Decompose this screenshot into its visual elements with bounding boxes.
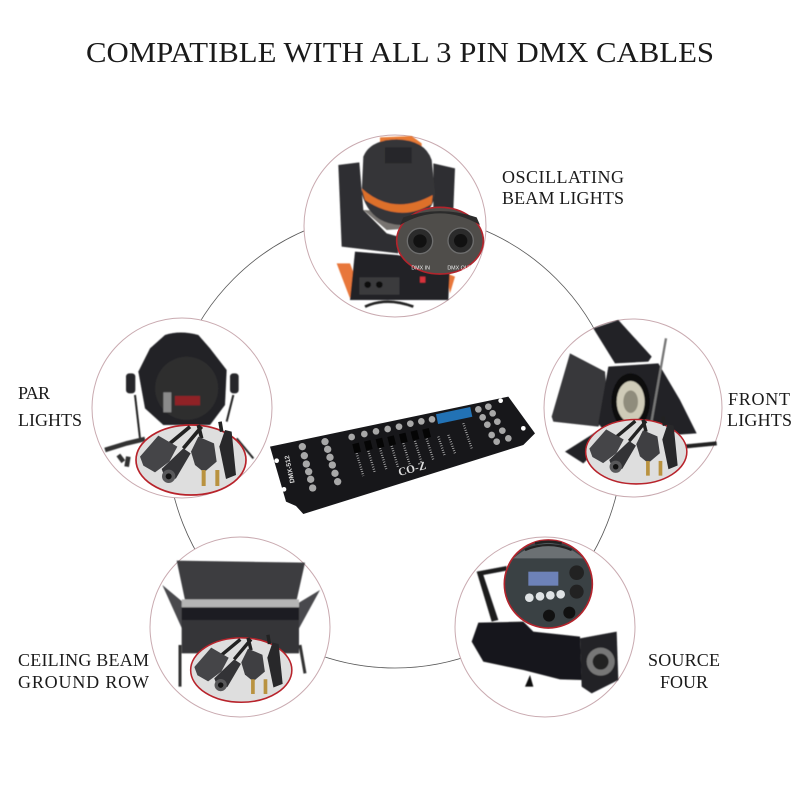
label: oscillating beam lights [502,167,624,208]
panel: par lights [92,318,272,498]
icon: connector callout [191,635,292,702]
label: front lights [727,389,792,430]
icon: DMX in and out sockets callout [397,207,483,274]
scene and fixture buttons [299,403,512,492]
icon: connector callout [586,416,687,484]
label: par lights: PAR [18,383,50,403]
label: front lights: LIGHTS [727,410,792,430]
label: source four: SOURCE [648,650,720,670]
label: par lights [18,383,82,430]
label: front lights: FRONT [728,389,790,409]
controller body [270,397,535,514]
panel: DMX-512 controller [270,397,535,514]
icon: control panel callout [504,540,592,628]
label: par lights: LIGHTS [18,410,82,430]
faders [357,423,472,476]
label: source four: FOUR [660,672,708,692]
label: source four [648,650,720,692]
icon: par light [105,332,253,495]
icon: DMX in and out sockets callout: DMX OUT [447,265,473,271]
display [436,407,472,424]
panel: source four [455,537,635,717]
label: ceiling beam ground row: GROUND ROW [18,672,149,692]
icon: source four spotlight [472,540,618,693]
brand and model text: CO-Z [397,460,427,479]
panel: DMX-512 controller: DMX-512 [284,454,297,484]
label: oscillating beam lights: BEAM LIGHTS [502,188,624,208]
icon: ceiling beam light [162,561,320,702]
icon: connector callout [136,422,246,495]
icon: moving head light [337,136,483,307]
title: COMPATIBLE WITH ALL 3 PIN DMX CABLES [86,37,714,69]
panel: front lights [544,319,722,497]
icon: front light with barn doors [552,320,717,484]
label: ceiling beam ground row: CEILING BEAM [18,650,149,670]
panel: oscillating beam lights [304,135,486,317]
label: ceiling beam ground row [18,650,149,692]
label: oscillating beam lights: OSCILLATING [502,167,624,187]
panel: ceiling beam ground row [150,537,330,717]
icon: DMX in and out sockets callout: DMX IN [411,265,430,271]
